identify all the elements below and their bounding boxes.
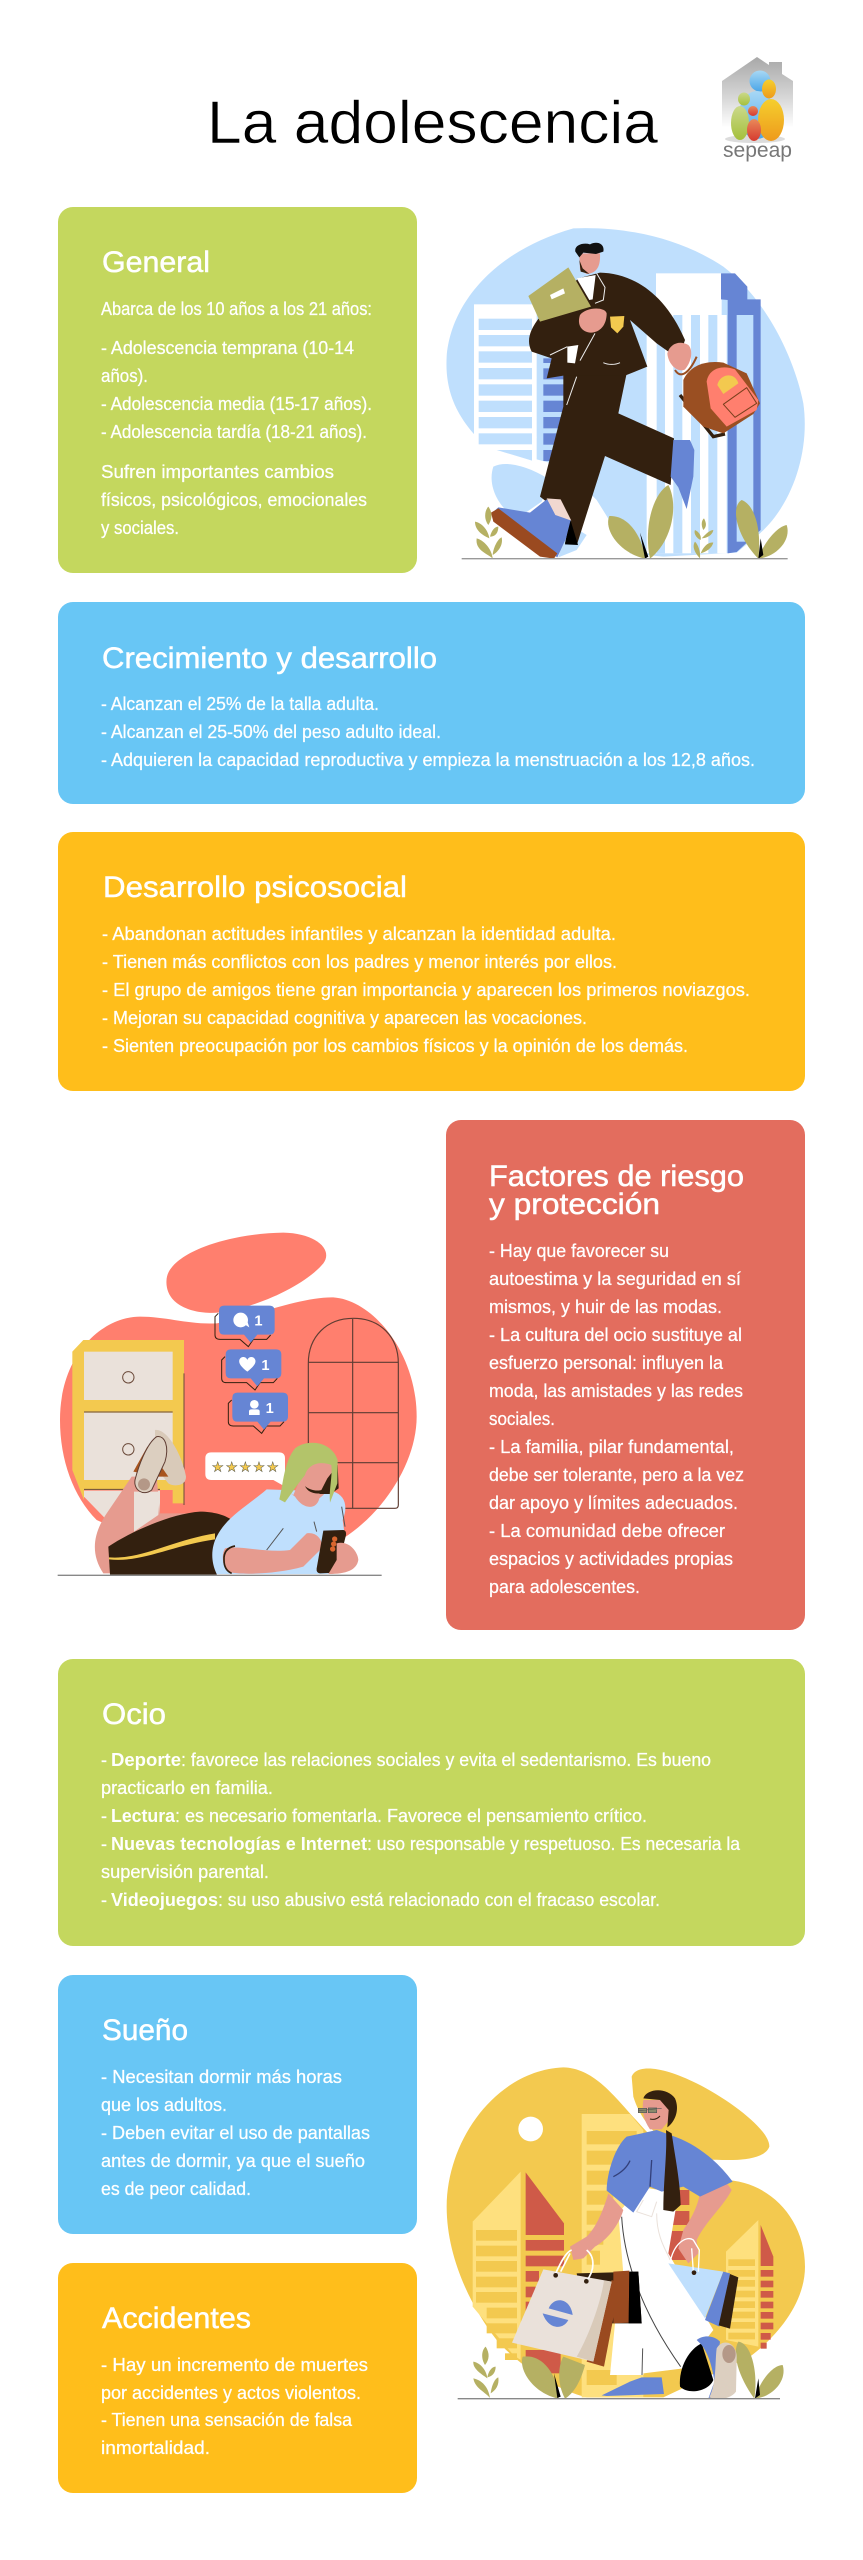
text: Ocio body: : favorece las relaciones sociales y evita el sedentarismo. Es bueno bbox=[181, 1750, 711, 1770]
text: Ocio body: - bbox=[101, 1890, 107, 1910]
text: Ocio body: - bbox=[101, 1750, 107, 1770]
notification bubbles: 1 bbox=[261, 1358, 269, 1374]
rating bubble: ★ bbox=[253, 1460, 265, 1475]
text: Crecimiento body: - Adquieren la capacidad reproductiva y empieza la menstruación a los 12,8 años. bbox=[101, 750, 755, 770]
text: Factores body: para adolescentes. bbox=[489, 1577, 640, 1597]
illustration: girl lying down with phone bbox=[58, 1233, 417, 1575]
text: Desarrollo body: - Abandonan actitudes infantiles y alcanzan la identidad adulta. bbox=[102, 924, 616, 944]
illustration: woman with shopping bags bbox=[447, 2067, 805, 2399]
text: Accidentes body: inmortalidad. bbox=[101, 2438, 210, 2458]
text: Sueño body bbox=[101, 2067, 370, 2199]
panel: Desarrollo psicosocial bbox=[58, 832, 805, 1091]
rating bubble: ★ bbox=[239, 1460, 251, 1475]
text: Factores body: debe ser tolerante, pero a la vez bbox=[489, 1465, 744, 1485]
left tower bbox=[473, 2172, 521, 2360]
text: Crecimiento body: - Alcanzan el 25-50% del peso adulto ideal. bbox=[101, 722, 441, 742]
text: Sueño body: es de peor calidad. bbox=[101, 2179, 251, 2199]
text: General body: físicos, psicológicos, emocionales bbox=[101, 490, 367, 510]
shoes bbox=[602, 2377, 664, 2396]
heading: Crecimiento y desarrollo: Crecimiento y desarrollo bbox=[102, 642, 437, 675]
text: Ocio body bbox=[101, 1750, 741, 1910]
arms bbox=[570, 2193, 623, 2260]
plants bbox=[475, 485, 788, 559]
text: Factores body: - La cultura del ocio sustituye al bbox=[489, 1325, 742, 1345]
panel: Accidentes bbox=[58, 2263, 417, 2493]
rating bubble bbox=[205, 1452, 285, 1487]
text: Desarrollo body: - Sienten preocupación por los cambios físicos y la opinión de los demás. bbox=[102, 1036, 688, 1056]
heading: Factores de riesgo y protección bbox=[489, 1160, 744, 1221]
notification bubbles: 1 bbox=[254, 1314, 262, 1330]
text: Factores body: - La comunidad debe ofrecer bbox=[489, 1521, 725, 1541]
heading: Factores de riesgo y protección: Factores de riesgo bbox=[489, 1160, 744, 1193]
text: General body: - Adolescencia tardía (18-21 años). bbox=[101, 422, 367, 442]
panel: Sueño bbox=[58, 1975, 417, 2234]
text: Ocio body: Lectura bbox=[111, 1806, 176, 1826]
right bag bbox=[668, 2263, 723, 2318]
text: Accidentes body: - Tienen una sensación de falsa bbox=[101, 2410, 353, 2430]
text: General body: - Adolescencia temprana (10-14 bbox=[101, 338, 354, 358]
text: Sueño body: - Deben evitar el uso de pantallas bbox=[101, 2123, 370, 2143]
trousers bbox=[610, 2187, 713, 2375]
right tower bbox=[726, 2220, 758, 2347]
text: General body: años). bbox=[101, 366, 148, 386]
text: Ocio body: Nuevas tecnologías e Internet bbox=[111, 1834, 367, 1854]
text: Ocio body: : uso responsable y respetuoso. Es necesaria la bbox=[367, 1834, 741, 1854]
text: Accidentes body bbox=[101, 2355, 368, 2458]
text: General body: y sociales. bbox=[101, 518, 179, 538]
heading: General: General bbox=[102, 246, 210, 279]
text: Desarrollo body: - Mejoran su capacidad cognitiva y aparecen las vocaciones. bbox=[102, 1008, 587, 1028]
pants bbox=[540, 373, 674, 543]
text: Sueño body: antes de dormir, ya que el sueño bbox=[101, 2151, 365, 2171]
text: General body bbox=[101, 299, 372, 538]
ponytail bbox=[663, 2130, 681, 2212]
text: Ocio body: practicarlo en familia. bbox=[101, 1778, 273, 1798]
notification bubbles: 1 bbox=[266, 1401, 274, 1417]
trousers bbox=[108, 1512, 232, 1575]
blouse bbox=[607, 2130, 733, 2213]
text: Ocio body: Videojuegos bbox=[111, 1890, 218, 1910]
legs and shoe bbox=[95, 1477, 187, 1573]
text: General body: Abarca de los 10 años a los 21 años: bbox=[101, 299, 372, 319]
heading: Factores de riesgo y protección: y protección bbox=[489, 1188, 660, 1221]
shirt bbox=[212, 1489, 345, 1574]
panel: Crecimiento y desarrollo bbox=[58, 602, 805, 804]
panel: Ocio bbox=[58, 1659, 805, 1946]
text: Ocio body: Deporte bbox=[111, 1750, 181, 1770]
text: Ocio body: : es necesario fomentarla. Favorece el pensamiento crítico. bbox=[175, 1806, 647, 1826]
text: Factores body: mismos, y huir de las modas. bbox=[489, 1297, 722, 1317]
text: Accidentes body: por accidentes y actos violentos. bbox=[101, 2383, 361, 2403]
text: Accidentes body: - Hay un incremento de muertes bbox=[101, 2355, 368, 2375]
text: Factores body: - Hay que favorecer su bbox=[489, 1241, 669, 1261]
panel: Factores de riesgo y protección bbox=[446, 1120, 805, 1630]
shoe bbox=[492, 499, 571, 557]
hands bbox=[579, 309, 607, 333]
head bbox=[579, 253, 600, 274]
logo: sepeap: sepeap bbox=[723, 139, 792, 162]
heading: Accidentes: Accidentes bbox=[102, 2302, 251, 2335]
backpack bbox=[675, 357, 697, 374]
heading: Ocio: Ocio bbox=[102, 1698, 166, 1731]
text: Factores body: dar apoyo y límites adecuados. bbox=[489, 1493, 738, 1513]
text: Ocio body: - bbox=[101, 1806, 107, 1826]
text: Desarrollo body bbox=[102, 924, 750, 1056]
centre tower bbox=[582, 2114, 643, 2397]
text: Sueño body: que los adultos. bbox=[101, 2095, 227, 2115]
text: Ocio body: supervisión parental. bbox=[101, 1862, 269, 1882]
text: Crecimiento body bbox=[101, 694, 755, 770]
jacket bbox=[529, 273, 685, 378]
text: Factores body: autoestima y la seguridad en sí bbox=[489, 1269, 741, 1289]
front bag bbox=[512, 2269, 612, 2362]
text: Factores body: - La familia, pilar fundamental, bbox=[489, 1437, 734, 1457]
head and hair bbox=[288, 1461, 332, 1507]
text: Ocio body: - bbox=[101, 1834, 107, 1854]
dark and brown bags bbox=[577, 2272, 642, 2323]
text: Sueño body: - Necesitan dormir más horas bbox=[101, 2067, 342, 2087]
notification bubbles bbox=[215, 1306, 288, 1433]
illustration: student walking with backpack bbox=[446, 228, 805, 559]
text: Desarrollo body: - Tienen más conflictos con los padres y menor interés por ellos. bbox=[102, 952, 617, 972]
rating bubble: ★ bbox=[226, 1460, 238, 1475]
heading: Desarrollo psicosocial: Desarrollo psicosocial bbox=[103, 871, 407, 904]
text: Crecimiento body: - Alcanzan el 25% de la talla adulta. bbox=[101, 694, 379, 714]
plants bbox=[473, 2342, 784, 2399]
logo: sepeap bbox=[722, 57, 793, 162]
window bbox=[308, 1318, 398, 1508]
text: Factores body: sociales. bbox=[489, 1409, 555, 1429]
cabinet bbox=[72, 1340, 184, 1503]
text: Desarrollo body: - El grupo de amigos tiene gran importancia y aparecen los primeros noviazgos. bbox=[102, 980, 750, 1000]
text: Factores body: moda, las amistades y las redes bbox=[489, 1381, 743, 1401]
rating bubble: ★ bbox=[212, 1460, 224, 1475]
text: Factores body: esfuerzo personal: influyen la bbox=[489, 1353, 724, 1373]
text: Ocio body: : su uso abusivo está relacionado con el fracaso escolar. bbox=[218, 1890, 660, 1910]
folder bbox=[528, 267, 591, 322]
heading: Sueño: Sueño bbox=[102, 2014, 188, 2047]
text: Factores body bbox=[489, 1241, 744, 1597]
red tower bbox=[526, 2172, 564, 2235]
rating bubble: ★ bbox=[267, 1460, 279, 1475]
text: General body: - Adolescencia media (15-17 años). bbox=[101, 394, 372, 414]
arm and phone bbox=[223, 1533, 322, 1574]
title: La adolescencia bbox=[207, 89, 659, 156]
text: General body: Sufren importantes cambios bbox=[101, 462, 334, 482]
panel: General bbox=[58, 207, 417, 573]
text: Factores body: espacios y actividades propias bbox=[489, 1549, 733, 1569]
head bbox=[643, 2100, 671, 2129]
